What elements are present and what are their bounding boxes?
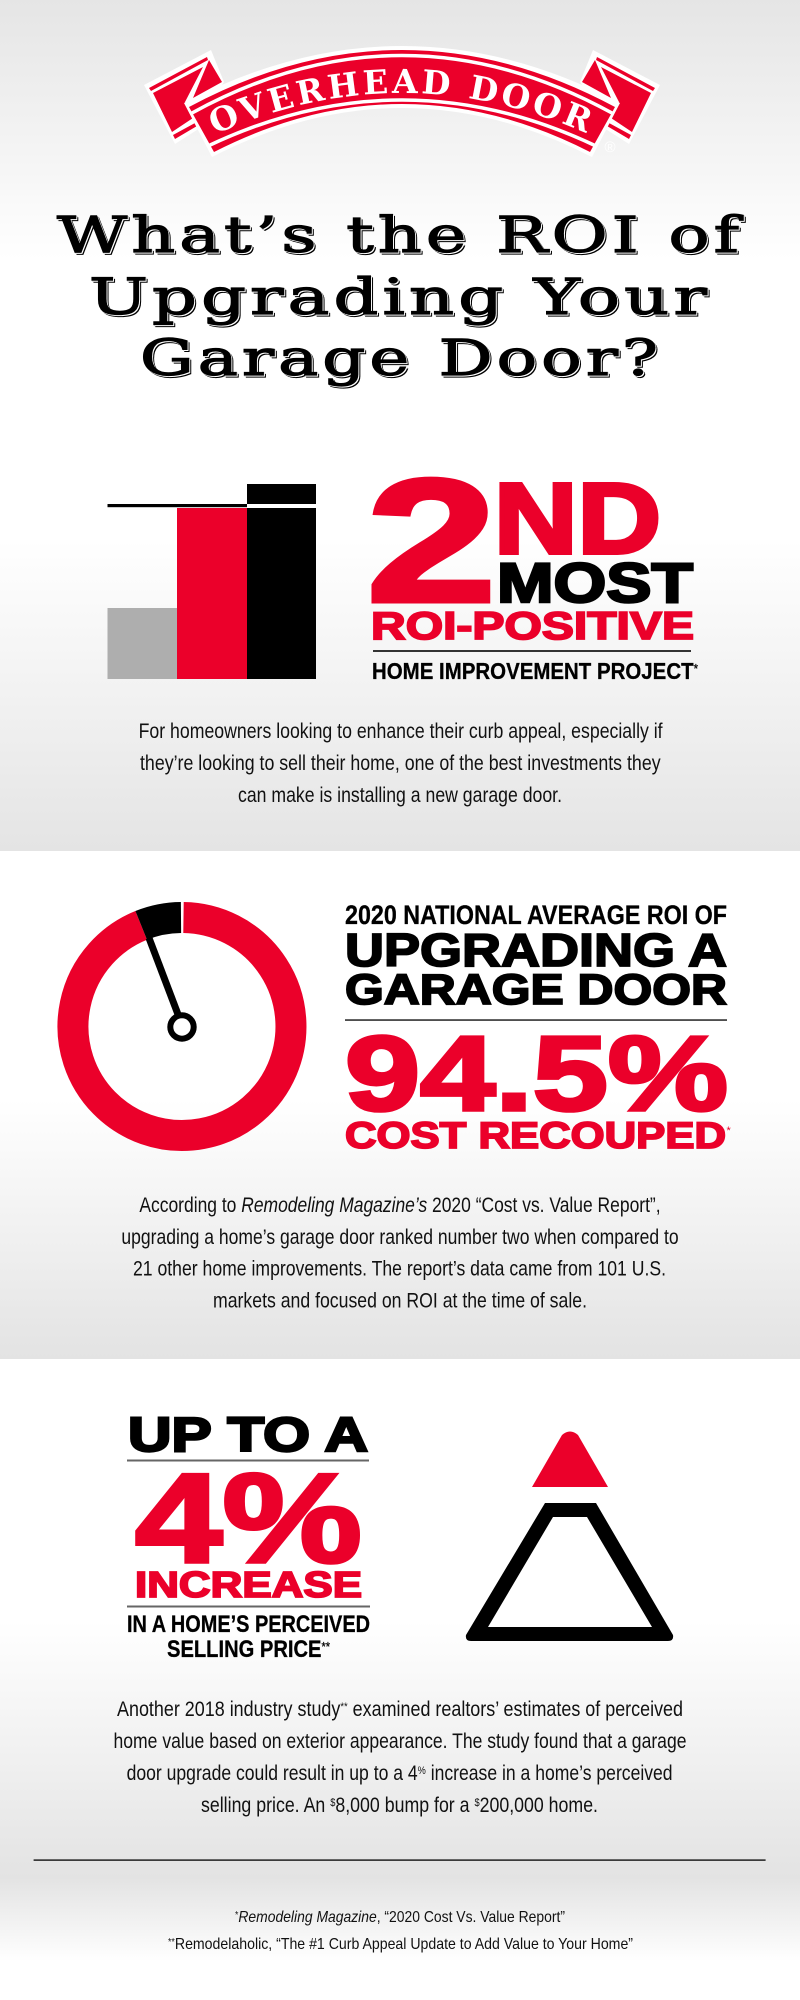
4%: 4%: [135, 1447, 362, 1589]
divider line: [127, 1606, 370, 1608]
text block: Remodeling Magazine paragraph: [121, 1194, 679, 1312]
ROI-POSITIVE: ROI-POSITIVE: [371, 605, 694, 648]
title: What’s the ROI of: [57, 206, 744, 264]
logo wordmark: OVERHEAD DOOR: [210, 68, 590, 134]
title: Garage Door?: [140, 329, 662, 387]
icon: upward arrow: [466, 1432, 673, 1641]
text block: realtor study paragraph: Another 2018 industry study** examined realtors’ estimates of perceived: [117, 1698, 683, 1721]
text block: Remodeling Magazine paragraph: According to Remodeling Magazine’s 2020 “Cost vs. Value Report”,: [139, 1194, 661, 1217]
UP TO A: UP TO A: [128, 1409, 368, 1462]
MOST: MOST: [497, 551, 693, 614]
panel: second statistic background: [0, 851, 800, 1359]
in a home's perceived: IN A HOME’S PERCEIVED: [127, 1611, 370, 1638]
UPGRADING A: UPGRADING A: [345, 924, 727, 976]
arrow head: [532, 1432, 608, 1487]
text block: realtor study paragraph: selling price. An $8,000 bump for a $200,000 home.: [201, 1794, 598, 1817]
divider line: [345, 1019, 727, 1021]
ND suffix: ND: [494, 463, 661, 575]
statistic: national average ROI: [345, 900, 732, 1156]
statistic: 2nd most ROI-positive: [366, 444, 698, 684]
selling price: SELLING PRICE**: [167, 1636, 330, 1663]
text block: Remodeling Magazine paragraph: markets and focused on ROI at the time of sale.: [213, 1290, 587, 1312]
logo right ribbon tail: [580, 50, 660, 144]
2020 NATIONAL AVERAGE ROI OF: 2020 NATIONAL AVERAGE ROI OF: [345, 900, 727, 930]
94.5%: 94.5%: [345, 1015, 728, 1133]
text block: curb appeal paragraph: [139, 720, 663, 807]
divider line: [127, 1460, 369, 1462]
panel: header and first statistic background: [0, 0, 800, 851]
INCREASE: INCREASE: [135, 1564, 362, 1605]
footnotes: *Remodeling Magazine, “2020 Cost Vs. Value Report”: [235, 1909, 565, 1926]
asterisk: *: [726, 1125, 732, 1137]
big numeral 2: 2: [366, 444, 497, 640]
text block: curb appeal paragraph: they’re looking to sell their home, one of the best investments they: [140, 752, 661, 775]
logo left ribbon tail: [144, 50, 224, 144]
panel: third statistic and footnotes background: [0, 1359, 800, 2000]
divider line: [373, 650, 691, 652]
title: Upgrading Your: [89, 268, 711, 326]
footnotes: **Remodelaholic, “The #1 Curb Appeal Update to Add Value to Your Home”: [168, 1936, 633, 1953]
footnotes: [168, 1909, 633, 1953]
footnote divider: [34, 1859, 766, 1861]
logo registered mark: ®: [604, 139, 616, 156]
GARAGE DOOR: GARAGE DOOR: [345, 966, 727, 1014]
arrow trapezoid body: [466, 1503, 673, 1641]
text block: realtor study paragraph: home value based on exterior appearance. The study found that a garage: [114, 1730, 686, 1753]
icon: rising bar chart: [108, 484, 316, 679]
text block: Remodeling Magazine paragraph: upgrading a home’s garage door ranked number two when compared to: [121, 1226, 679, 1249]
COST RECOUPED: COST RECOUPED: [345, 1114, 726, 1156]
title: [57, 206, 744, 387]
HOME IMPROVEMENT PROJECT: HOME IMPROVEMENT PROJECT*: [372, 658, 698, 684]
text block: curb appeal paragraph: can make is installing a new garage door.: [238, 784, 562, 807]
chart: 94.5% donut gauge: [73, 918, 291, 1135]
logo main ribbon: [184, 46, 620, 157]
text block: realtor study paragraph: door upgrade could result in up to a 4% increase in a home’s perceived: [127, 1762, 673, 1785]
text block: realtor study paragraph: [114, 1698, 686, 1817]
text block: Remodeling Magazine paragraph: 21 other home improvements. The report’s data came from 101 U.S.: [133, 1258, 666, 1280]
text block: curb appeal paragraph: For homeowners looking to enhance their curb appeal, especially if: [139, 720, 663, 743]
logo: Overhead Door banner: [144, 46, 660, 156]
statistic: up to a 4% increase: [127, 1409, 370, 1663]
